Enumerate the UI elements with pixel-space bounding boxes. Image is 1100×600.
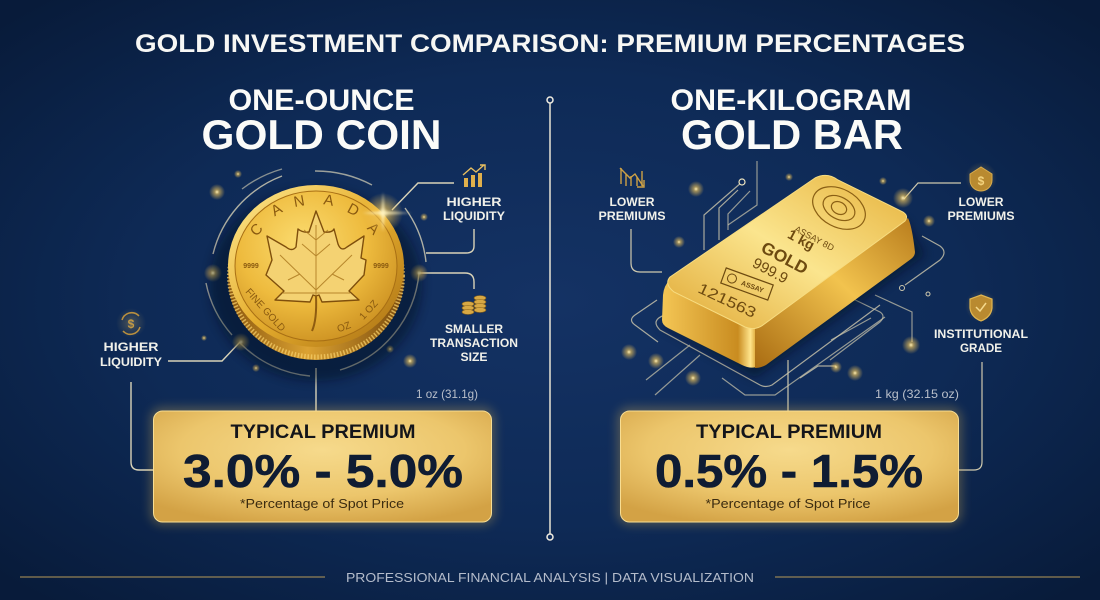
- icon: dollar house badge: [965, 162, 997, 194]
- coin edge: [228, 196, 404, 360]
- heading: one-kilogram gold bar: GOLD BAR: [681, 111, 903, 158]
- coin text: 1 OZ: [358, 298, 381, 322]
- coin text: N: [292, 192, 306, 211]
- label: smaller transaction size: SMALLER: [445, 324, 504, 336]
- label: institutional grade: INSTITUTIONAL: [934, 329, 1028, 341]
- label: institutional grade: GRADE: [960, 343, 1002, 355]
- center divider: [547, 97, 553, 540]
- label: smaller transaction size: TRANSACTION: [430, 338, 518, 350]
- coin text: D: [344, 200, 362, 220]
- label: smaller transaction size: [430, 324, 518, 364]
- label: lower premiums right: PREMIUMS: [948, 211, 1015, 223]
- label: institutional grade: [934, 329, 1028, 355]
- bar engraving: ASSAY 8D: [793, 224, 836, 253]
- label: smaller transaction size: SIZE: [460, 352, 488, 364]
- coin face: [228, 185, 404, 347]
- coin text: A: [268, 200, 285, 220]
- label: lower premiums right: [948, 197, 1015, 223]
- coin text: 9999: [243, 263, 259, 270]
- label: higher liquidity right: HIGHER: [446, 197, 502, 209]
- premium box: coin: [150, 407, 495, 525]
- coin text: C: [247, 220, 267, 240]
- label: higher liquidity left: HIGHER: [104, 342, 159, 354]
- panel: one-kilogram gold bar: [598, 84, 1028, 525]
- icon: circular dollar: $: [128, 317, 135, 331]
- label: higher liquidity left: [100, 342, 162, 369]
- panel: one-ounce gold coin: [100, 84, 518, 525]
- label: lower premiums right: LOWER: [958, 197, 1004, 209]
- icon: growth chart: [463, 165, 485, 187]
- bar engraving: GOLD: [758, 238, 811, 278]
- premium box: coin: 3.0% - 5.0%: [183, 445, 463, 497]
- bar engraving: 1 kg: [785, 226, 817, 253]
- coin text: A: [364, 219, 383, 238]
- bar engraving: 999.9: [750, 255, 791, 287]
- bar top face: [668, 175, 907, 329]
- premium box: bar: TYPICAL PREMIUM: [696, 422, 882, 443]
- heading: one-ounce gold coin: [202, 84, 442, 158]
- bar front side: [755, 218, 915, 368]
- bar left side: [662, 280, 757, 368]
- weight label: 1 oz: 1 oz (31.1g): [416, 387, 478, 401]
- icon: shield: [965, 290, 997, 322]
- coin text: A: [322, 191, 335, 210]
- gold bar: [660, 175, 925, 378]
- premium box: coin: *Percentage of Spot Price: [240, 496, 404, 511]
- icon: falling chart: [620, 168, 644, 187]
- heading: one-ounce gold coin: GOLD COIN: [202, 111, 442, 158]
- icon: dollar house badge: $: [978, 174, 985, 188]
- label: higher liquidity left: LIQUIDITY: [100, 357, 162, 369]
- connector lines: coin callouts: [131, 169, 474, 470]
- premium box: coin: TYPICAL PREMIUM: [230, 422, 416, 443]
- label: higher liquidity right: [443, 197, 505, 223]
- premium box: bar: *Percentage of Spot Price: [706, 496, 870, 511]
- label: lower premiums left: LOWER: [610, 197, 655, 209]
- bar engraving: [695, 178, 873, 322]
- coin: [210, 185, 422, 381]
- coin text: 9999: [373, 263, 389, 270]
- coin text: [243, 191, 389, 335]
- label: lower premiums left: [598, 197, 666, 223]
- heading: one-kilogram gold bar: ONE-KILOGRAM: [670, 84, 912, 117]
- maple leaf: [266, 211, 366, 302]
- connector lines: bar circuit traces: [631, 161, 982, 470]
- title: GOLD INVESTMENT COMPARISON: PREMIUM PERCENTAGES: [135, 30, 965, 58]
- premium box: bar: [617, 407, 962, 525]
- footer: PROFESSIONAL FINANCIAL ANALYSIS | DATA VISUALIZATION: [346, 570, 754, 585]
- weight label: 1 kg: 1 kg (32.15 oz): [875, 387, 959, 401]
- heading: one-kilogram gold bar: [670, 84, 912, 158]
- label: higher liquidity right: LIQUIDITY: [443, 211, 505, 223]
- bar engraving: 121563: [695, 280, 759, 322]
- sparkle dots around coin: [201, 170, 428, 372]
- label: lower premiums left: PREMIUMS: [598, 211, 666, 223]
- coin text: OZ: [336, 320, 353, 335]
- coin text: FINE GOLD: [243, 287, 287, 334]
- icon: stacked coins: [462, 296, 486, 314]
- icon: circular dollar: [116, 308, 146, 338]
- bar engraving: ASSAY: [740, 280, 765, 295]
- star flare: [363, 193, 403, 233]
- sparkle dots around bar: [621, 173, 935, 386]
- premium box: bar: 0.5% - 1.5%: [655, 445, 923, 497]
- heading: one-ounce gold coin: ONE-OUNCE: [228, 84, 414, 117]
